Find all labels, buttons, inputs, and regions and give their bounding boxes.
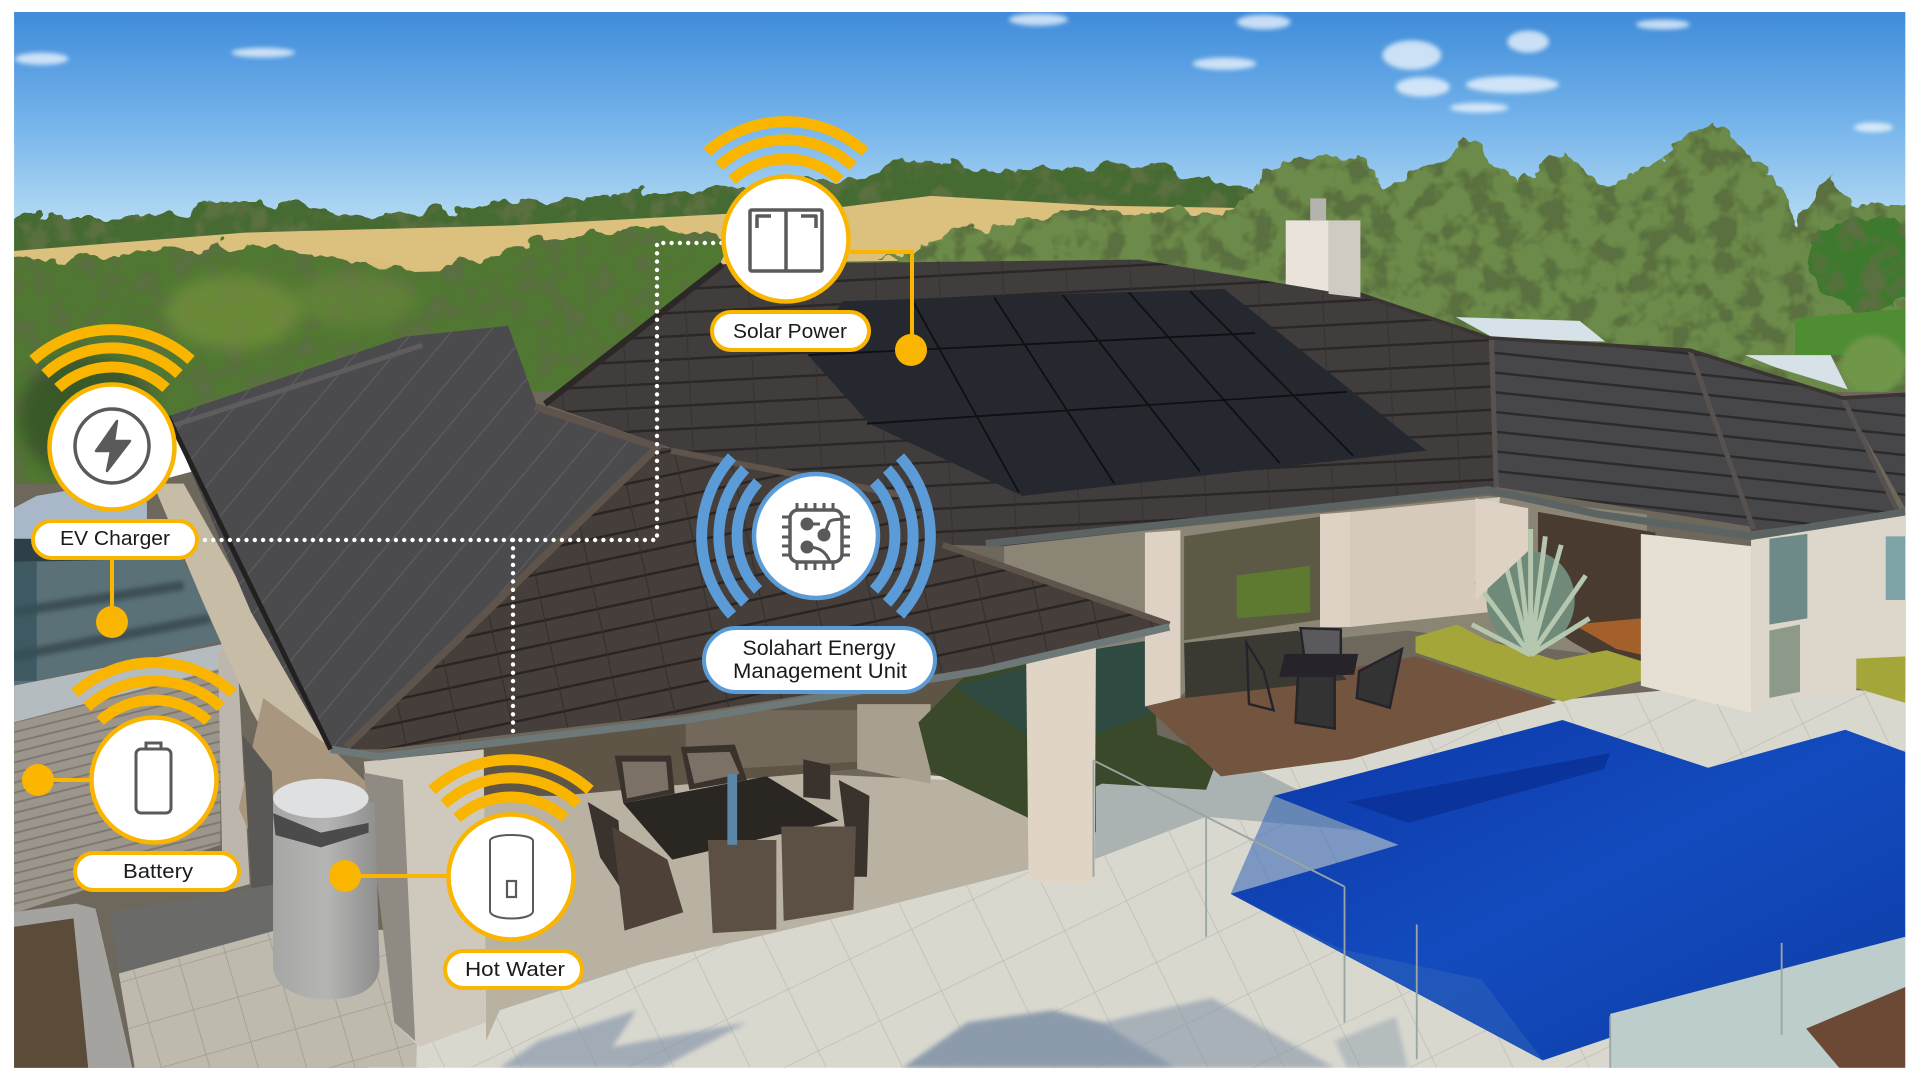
icon: lightning bolt [75, 409, 149, 483]
unit label: Solahart Energy [742, 637, 896, 660]
right ridges and gutter [1491, 338, 1898, 529]
bottom left paving [119, 928, 429, 1068]
dotted connector lines [205, 243, 724, 738]
cream walls right [1641, 534, 1751, 713]
hot water leader line and dot [329, 860, 450, 892]
solar power node [707, 122, 927, 366]
battery node [22, 663, 239, 890]
house base fill [13, 392, 1907, 1068]
energy management unit node [702, 457, 935, 692]
golden field [14, 196, 1234, 272]
battery leader line and dot [22, 764, 95, 796]
unit label: Management Unit [733, 660, 907, 683]
EV label: EV Charger [60, 527, 170, 550]
EV wifi arcs [33, 330, 191, 388]
battery label [75, 853, 239, 890]
dark room [1538, 512, 1656, 661]
house side wall [157, 484, 325, 744]
shed post [218, 639, 250, 891]
solar wifi arcs [707, 122, 865, 180]
shed wall strip and door [13, 642, 235, 722]
tree shadows on paving [500, 998, 1408, 1068]
shaded paving beside pillar [1094, 770, 1362, 859]
front roof ridges and gutters [347, 407, 658, 747]
front roof [347, 447, 1169, 749]
water heater tank [273, 779, 380, 999]
hot water label [445, 951, 582, 988]
distant tree line [0, 157, 1273, 282]
EV charger node [33, 330, 197, 638]
icon: solar panel [750, 210, 822, 271]
hot water wifi arcs [432, 760, 590, 818]
left hip roof [168, 326, 658, 749]
icon: battery [136, 743, 171, 813]
solar icon circle [724, 176, 848, 302]
battery icon circle [92, 718, 216, 842]
central upper roof [545, 260, 1494, 546]
rear wall [1004, 496, 1647, 710]
unit icon circle [754, 474, 878, 598]
verandah interior and glass [410, 678, 1096, 832]
blue signal arcs [702, 457, 930, 615]
solar power label: Solar Power [733, 320, 847, 343]
hot water icon circle [448, 814, 574, 940]
right hip roofs [1491, 338, 1751, 527]
swimming pool [1231, 720, 1905, 1060]
icon: water tank [490, 835, 533, 918]
hedge [1416, 624, 1646, 702]
EV icon circle [50, 384, 174, 510]
EV leader line and dot [96, 556, 128, 638]
timber deck [1146, 656, 1556, 776]
unit label [704, 628, 935, 692]
shrubs and palm by pillar [918, 643, 1218, 818]
battery wifi arcs [75, 663, 233, 721]
EV label [33, 521, 197, 558]
clouds [15, 13, 1893, 132]
icon: chip [782, 503, 850, 570]
outdoor table and chairs [1247, 628, 1402, 729]
sky [13, 11, 1907, 256]
solar leader line and dot [850, 252, 927, 366]
main paving [416, 686, 1907, 1068]
patio chairs and table [588, 744, 869, 933]
pillars [1026, 647, 1096, 884]
rear glazing [1184, 517, 1320, 640]
far trees behind roof [882, 122, 1920, 416]
right windows [1769, 534, 1807, 624]
hot water label: Hot Water [465, 958, 565, 981]
left planter [13, 904, 132, 1068]
tree underlay [14, 239, 1906, 484]
dark trees and hedge right [1806, 217, 1920, 310]
glass fence posts [1093, 760, 1782, 1068]
chimney [1286, 198, 1360, 298]
wall by tank [364, 749, 486, 1047]
hot water node [329, 760, 590, 988]
distant pale roofs [1456, 317, 1605, 342]
battery label: Battery [123, 860, 194, 883]
bottom right paving and timber [1610, 937, 1905, 1068]
parked car [13, 487, 147, 549]
shed roof [13, 558, 236, 686]
agave plant [1472, 529, 1589, 655]
solar power label [712, 312, 869, 350]
solar panel array [808, 289, 1427, 496]
trees left [14, 226, 724, 484]
rear pale wall [1351, 497, 1500, 627]
side path [110, 885, 273, 973]
shaded terrace paving [484, 759, 1029, 1041]
